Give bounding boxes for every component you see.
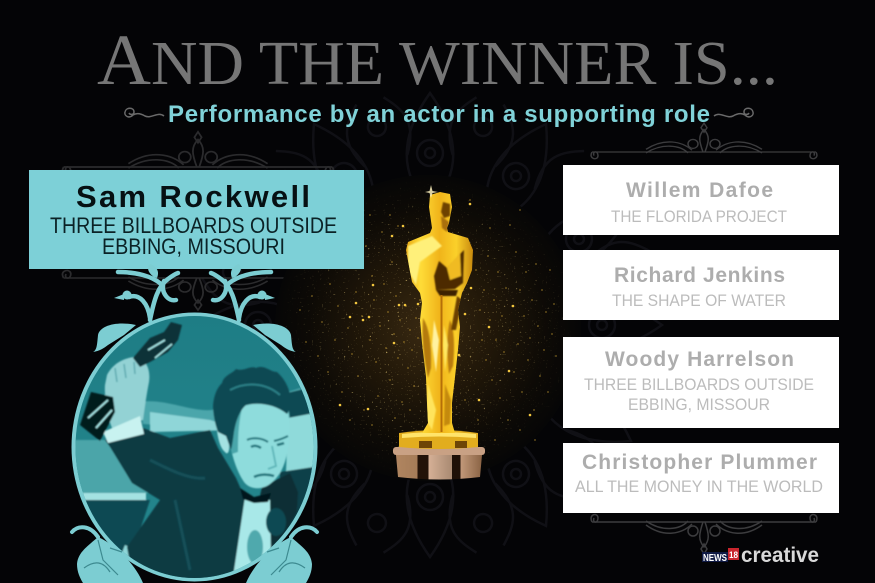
- face: [228, 402, 289, 488]
- spotlight circle with gold dust: [275, 175, 581, 481]
- suit: [105, 428, 250, 583]
- raised hand: [105, 357, 149, 428]
- boutonniere and mic: [247, 508, 286, 564]
- winner panel: Sam Rockwell: [76, 179, 310, 214]
- nominee card: Woody Harrelson: EBBING, MISSOUR: [628, 395, 770, 414]
- statue base: [393, 430, 485, 480]
- portrait photo: [70, 322, 320, 583]
- nominee card: Richard Jenkins: THE SHAPE OF WATER: [612, 291, 786, 310]
- ear: [217, 430, 229, 453]
- subtitle with flourishes: Performance by an actor in a supporting role: [168, 101, 710, 128]
- side brackets: [93, 323, 136, 352]
- title: AND THE WINNER IS...: [97, 20, 778, 100]
- nominee card: Richard Jenkins: Richard Jenkins: [614, 264, 785, 287]
- portrait frame lower ornament: [72, 527, 317, 583]
- winner panel: [29, 170, 364, 269]
- mandala background pattern: [198, 93, 662, 557]
- news18 creative logo: NEWS: [703, 553, 727, 564]
- facial features: [247, 436, 288, 477]
- vine leaves and dots: [93, 264, 296, 352]
- bow tie: [240, 488, 271, 503]
- ornamental dividers: [62, 123, 817, 554]
- nominee card: Woody Harrelson: THREE BILLBOARDS OUTSIDE: [584, 375, 814, 394]
- shirt cuff: [103, 416, 144, 443]
- shirt: [233, 497, 271, 577]
- winner panel: EBBING, MISSOURI: [102, 234, 285, 259]
- vines: [118, 272, 271, 320]
- nominee card: Christopher Plummer: [563, 443, 839, 513]
- oval rim: [72, 312, 318, 582]
- statue figure: [406, 192, 473, 433]
- nominee card: Christopher Plummer: Christopher Plummer: [582, 451, 817, 474]
- news18 creative logo: 18: [729, 550, 738, 560]
- nominee card: Willem Dafoe: Willem Dafoe: [626, 179, 773, 202]
- nominee card: Christopher Plummer: ALL THE MONEY IN THE WORLD: [575, 477, 823, 496]
- nominee card: Woody Harrelson: Woody Harrelson: [605, 348, 794, 371]
- hair: [213, 367, 291, 450]
- nominee card: Willem Dafoe: [563, 165, 839, 235]
- nominee card: Richard Jenkins: [563, 250, 839, 320]
- nominee card: Willem Dafoe: THE FLORIDA PROJECT: [611, 207, 787, 226]
- nominee card: Woody Harrelson: [563, 337, 839, 428]
- news18 creative logo: [702, 544, 819, 567]
- oscar statuette: [393, 185, 485, 480]
- winner panel: THREE BILLBOARDS OUTSIDE: [50, 213, 337, 238]
- portrait frame ornament: [72, 264, 318, 582]
- trophy in hand: [80, 322, 182, 441]
- statue glint: [425, 185, 438, 198]
- statue shading: [408, 202, 464, 432]
- news18 creative logo: creative: [741, 544, 819, 567]
- photo background streaks: [76, 388, 314, 557]
